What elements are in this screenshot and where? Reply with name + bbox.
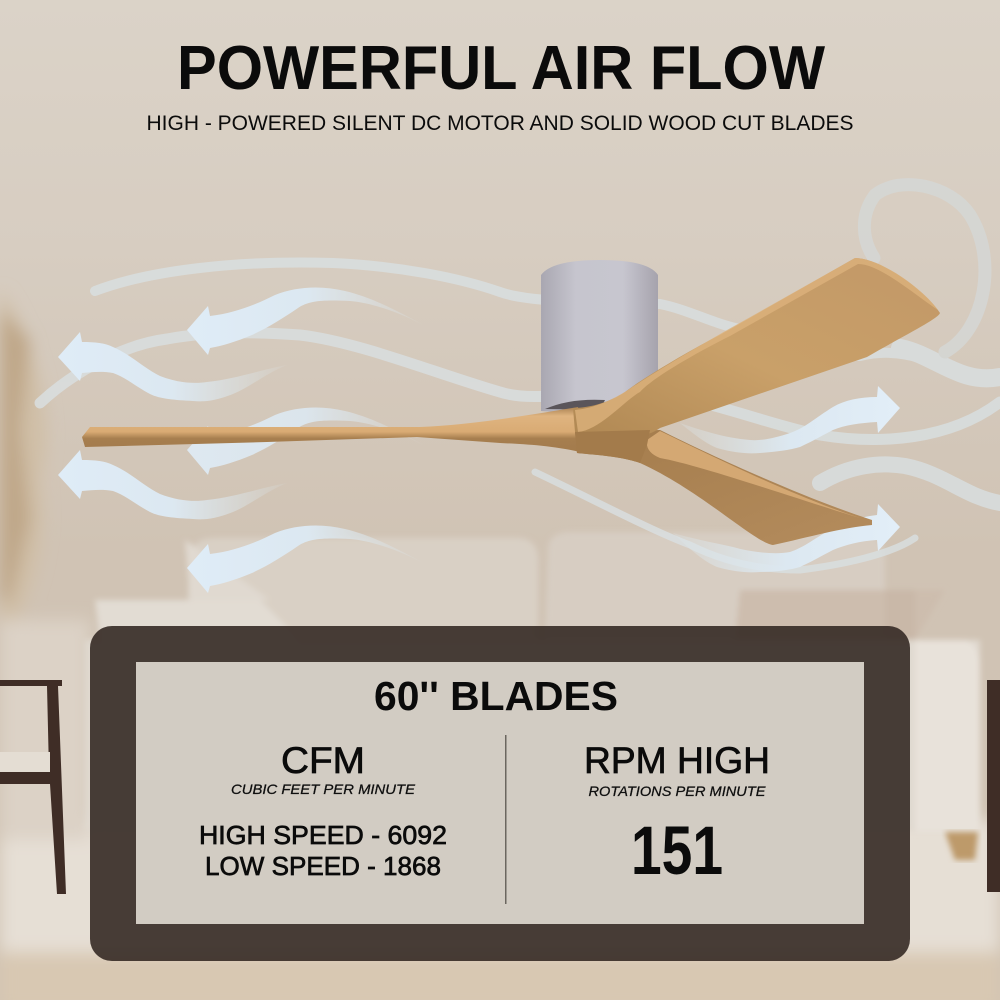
arrow: upper left air — [187, 288, 427, 355]
blade: lower right — [575, 430, 872, 545]
hub underside — [575, 430, 650, 463]
block: RPM — [584, 740, 770, 889]
title: POWERFUL AIR FLOW — [177, 34, 825, 103]
arrow: lower left air — [187, 526, 427, 593]
panel: specifications — [90, 626, 910, 961]
heading: blade size: 60'' BLADES — [374, 673, 618, 719]
block: CFM: CUBIC FEET PER MINUTE — [231, 781, 416, 797]
blade: upper right — [573, 258, 940, 436]
block: CFM: LOW SPEED - 1868 — [205, 851, 441, 881]
divider — [505, 735, 506, 904]
faint air currents — [40, 185, 1000, 570]
arrow: right lower air — [673, 504, 900, 572]
block: RPM: RPM HIGH — [584, 740, 770, 781]
block: RPM: 151 — [631, 812, 723, 889]
block: CFM: HIGH SPEED - 6092 — [199, 820, 447, 850]
arrow: mid left air — [187, 408, 427, 475]
fan motor housing — [541, 260, 658, 415]
ceiling fan — [82, 258, 940, 545]
floor and rug — [0, 290, 1000, 1000]
block: RPM: ROTATIONS PER MINUTE — [588, 783, 766, 799]
arrow: far left upper air — [58, 332, 287, 401]
arrow: far left lower air — [58, 450, 287, 519]
arrow: right mid air — [680, 386, 900, 453]
side chairs — [0, 680, 1000, 894]
block: CFM — [199, 740, 447, 881]
subtitle: HIGH - POWERED SILENT DC MOTOR AND SOLID WOOD CUT BLADES — [146, 112, 854, 135]
sofa legs and shadow — [945, 832, 978, 860]
air flow swooshes — [40, 185, 1000, 593]
blade: long left — [82, 407, 580, 452]
sofa — [85, 532, 980, 832]
block: CFM: CFM — [281, 740, 365, 781]
